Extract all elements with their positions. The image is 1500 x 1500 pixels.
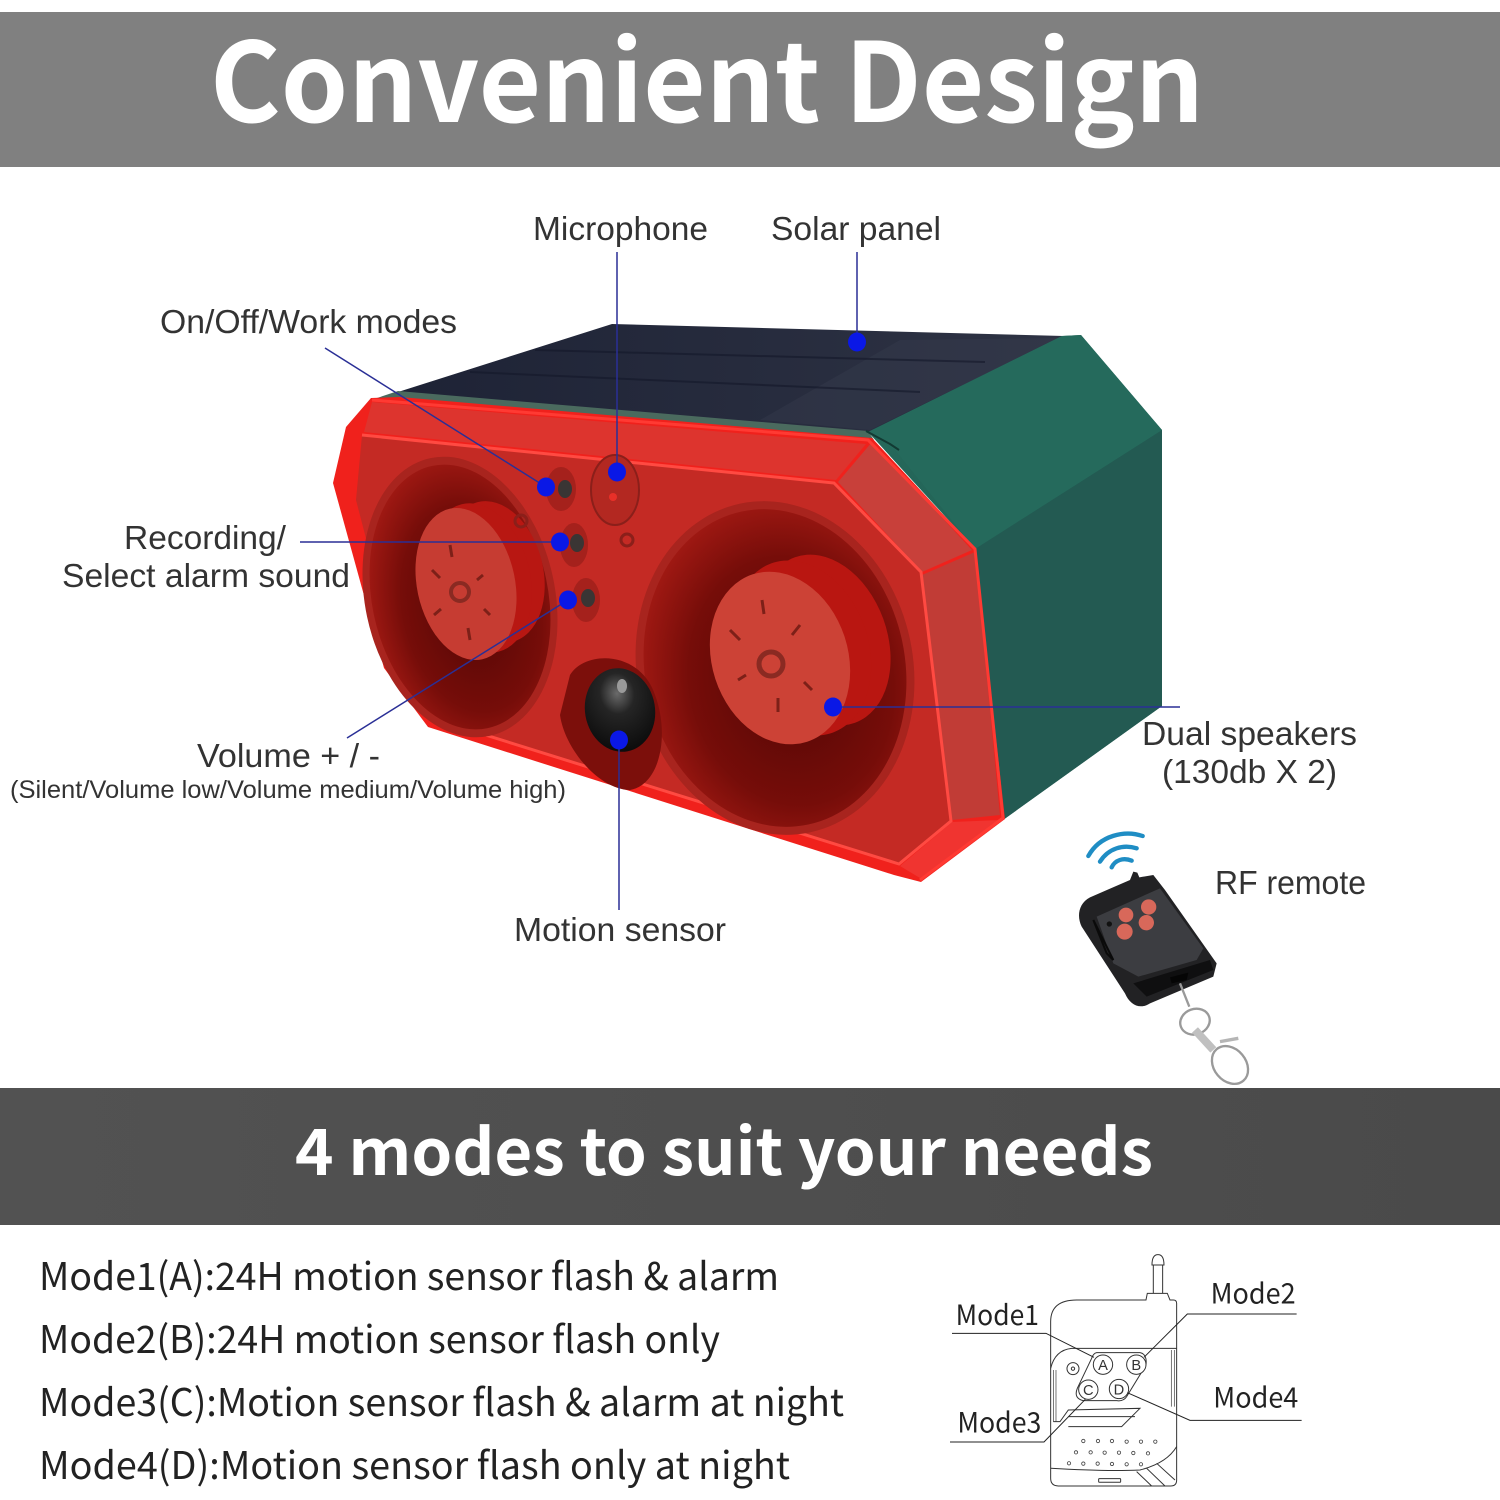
- label: dual speakers: [1142, 715, 1357, 790]
- subtitle band: [0, 1088, 1500, 1225]
- left speaker: [338, 438, 582, 756]
- label: dual speakers: (130db X 2): [1162, 753, 1337, 790]
- button A: A: [1098, 1358, 1108, 1374]
- mode labels: Mode1: [956, 1294, 1039, 1334]
- keychain clasp: [1177, 983, 1256, 1091]
- green housing side: [866, 335, 1162, 820]
- button B: [1127, 1355, 1146, 1374]
- button A: [1093, 1355, 1113, 1374]
- speaker holes: [1067, 1439, 1157, 1466]
- right speaker: [605, 475, 945, 861]
- button D: D: [1114, 1382, 1124, 1398]
- mode labels: Mode3: [957, 1402, 1041, 1442]
- label: volume: Volume + / -: [197, 737, 380, 774]
- button D: [1109, 1379, 1129, 1399]
- label: microphone: Microphone: [533, 210, 708, 247]
- label: volume: (Silent/Volume low/Volume medium/Volume high): [10, 776, 566, 804]
- mode labels: Mode2: [1211, 1272, 1296, 1312]
- mode list: Mode4(D):Motion sensor flash only at night: [39, 1435, 790, 1490]
- solar panel: [371, 324, 1064, 442]
- mode labels: Mode4: [1213, 1377, 1298, 1417]
- subtitle: 4 modes to suit your needs: [295, 1102, 1153, 1194]
- label: recording / select alarm sound: Recording/: [124, 519, 287, 556]
- label: dual speakers: Dual speakers: [1142, 715, 1357, 752]
- motion sensor: [560, 658, 662, 790]
- label: on/off/work modes: On/Off/Work modes: [160, 303, 457, 340]
- mode leader lines: [950, 1314, 1302, 1442]
- label: recording / select alarm sound: Select alarm sound: [62, 557, 350, 594]
- button C: [1079, 1380, 1098, 1399]
- icon: wireless signal: [1088, 834, 1143, 867]
- mode labels: [956, 1272, 1298, 1442]
- mode list: Mode1(A):24H motion sensor flash & alarm: [39, 1246, 779, 1301]
- mode list: Mode2(B):24H motion sensor flash only: [39, 1309, 720, 1364]
- RF remote photo: [1079, 834, 1256, 1091]
- mode list: [39, 1246, 844, 1490]
- label: solar panel: Solar panel: [771, 210, 941, 247]
- label: RF remote: RF remote: [1215, 864, 1366, 901]
- button B: B: [1131, 1358, 1141, 1374]
- product: solar alarm device: [333, 324, 1162, 882]
- remote outline: [1051, 1255, 1177, 1486]
- label: motion sensor: Motion sensor: [514, 911, 726, 948]
- red front face: [333, 397, 1005, 882]
- label: recording / select alarm sound: [62, 519, 350, 594]
- callout lines and dots: [300, 252, 1180, 910]
- title band: [0, 0, 1500, 167]
- label: volume: [10, 737, 566, 804]
- remote line diagram: [950, 1255, 1302, 1486]
- button C: C: [1083, 1383, 1094, 1399]
- mode list: Mode3(C):Motion sensor flash & alarm at night: [39, 1372, 844, 1427]
- control panel: buttons and microphone: [515, 455, 639, 622]
- key fob body: [1079, 872, 1217, 1006]
